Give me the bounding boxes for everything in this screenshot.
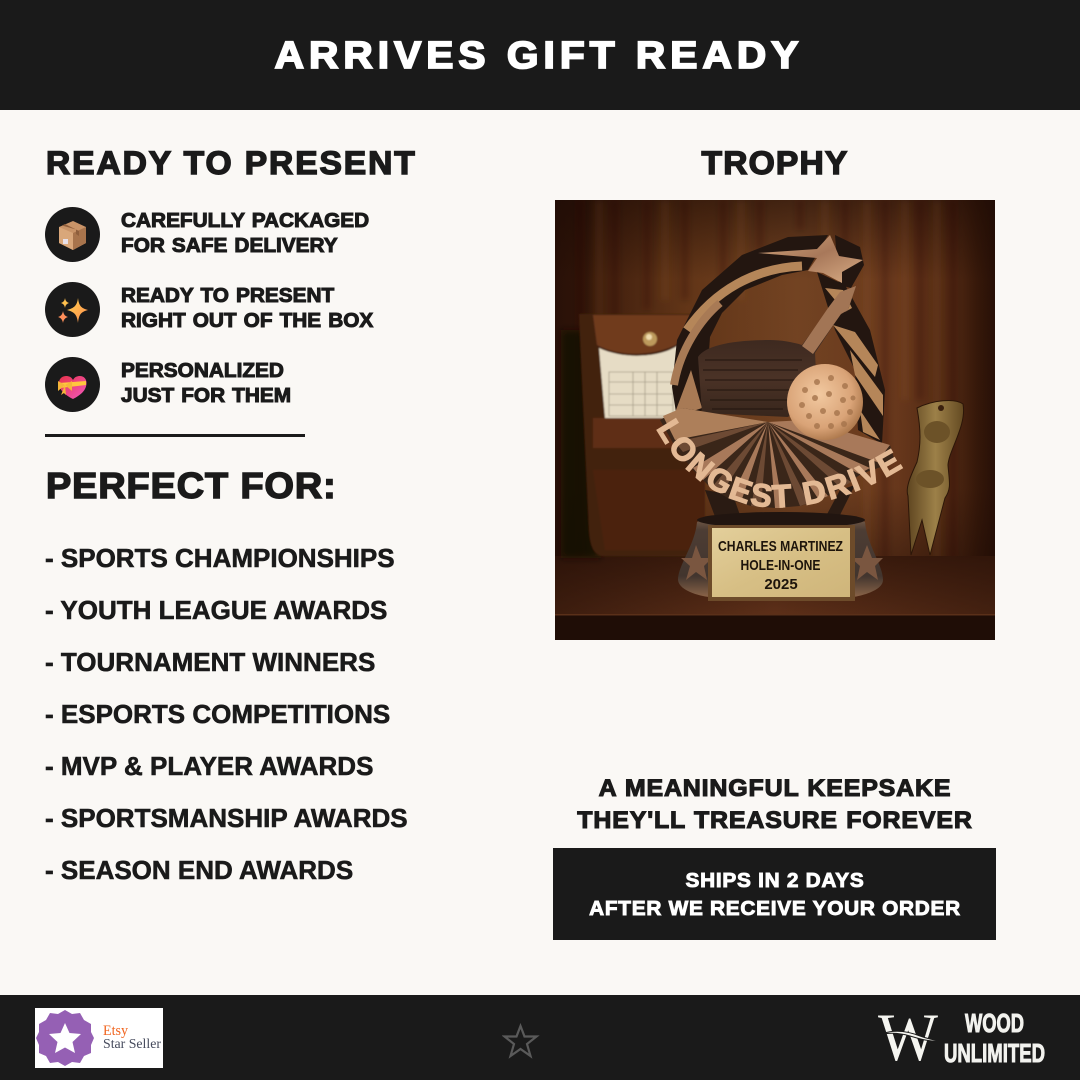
list item: - TOURNAMENT WINNERS [45, 647, 375, 677]
badge: etsy star seller [35, 1008, 163, 1068]
badge text: Star Seller [103, 1036, 162, 1051]
icon: sparkles [45, 282, 100, 337]
feature text: ready: READY TO PRESENT [121, 285, 334, 307]
list item: - SEASON END AWARDS [45, 855, 353, 885]
leather wallet with scorecard [561, 314, 705, 558]
feature text: packaged: FOR SAFE DELIVERY [121, 235, 338, 257]
feature text: packaged: CAREFULLY PACKAGED [121, 210, 369, 232]
trophy [656, 235, 904, 601]
icon: purple star badge [36, 1010, 94, 1066]
badge text: Etsy [103, 1023, 129, 1039]
list item: - YOUTH LEAGUE AWARDS [45, 595, 387, 625]
shelf [555, 556, 995, 640]
title: ARRIVES GIFT READY [275, 35, 803, 77]
logo: wood unlimited [878, 1005, 1045, 1070]
engraved plaque: HOLE-IN-ONE [740, 557, 820, 574]
badge text [103, 1023, 162, 1051]
golf ball [787, 364, 863, 440]
engraved plaque: CHARLES MARTINEZ [718, 538, 843, 555]
shipping text [589, 870, 961, 920]
icon: outline star [502, 1023, 540, 1059]
feature text: packaged [121, 210, 369, 257]
logo text [944, 1008, 1045, 1068]
feature text: personalized [120, 360, 291, 407]
list item: - MVP & PLAYER AWARDS [45, 751, 373, 781]
feature text: ready: RIGHT OUT OF THE BOX [121, 310, 373, 332]
list: occasions [45, 543, 408, 885]
logo text: WOOD [965, 1008, 1024, 1038]
heading: trophy: TROPHY [702, 145, 848, 181]
star and ribbon ring [672, 235, 885, 444]
icon: package [45, 207, 100, 262]
tagline: A MEANINGFUL KEEPSAKE [599, 775, 951, 802]
heading: ready to present: READY TO PRESENT [46, 145, 417, 181]
tagline: THEY'LL TREASURE FOREVER [577, 807, 973, 834]
engraved plaque: 2025 [764, 576, 798, 593]
feature text: personalized: JUST FOR THEM [121, 385, 291, 407]
fan of rays [660, 408, 895, 508]
trophy base [678, 512, 883, 597]
shipping box [553, 848, 996, 940]
list item: - SPORTSMANSHIP AWARDS [45, 803, 408, 833]
shipping text: SHIPS IN 2 DAYS [686, 870, 864, 892]
wood wall [555, 200, 995, 560]
footer band [0, 995, 1080, 1080]
legs behind base [705, 485, 855, 530]
photo: trophy on wooden shelf [555, 200, 995, 640]
divot tool [907, 401, 964, 555]
shipping text: AFTER WE RECEIVE YOUR ORDER [589, 898, 961, 920]
feature text: ready [121, 285, 374, 332]
list item: - SPORTS CHAMPIONSHIPS [45, 543, 395, 573]
icon: gift heart [45, 357, 100, 412]
tagline [576, 775, 973, 834]
heading: perfect for: PERFECT FOR: [46, 465, 337, 506]
engraved plaque [708, 525, 855, 601]
header band [0, 0, 1080, 110]
golf club [698, 286, 856, 417]
list item: - ESPORTS COMPETITIONS [45, 699, 390, 729]
engraved text: longest drive: LONGEST DRIVE [656, 418, 904, 508]
feature text: personalized: PERSONALIZED [121, 360, 284, 382]
